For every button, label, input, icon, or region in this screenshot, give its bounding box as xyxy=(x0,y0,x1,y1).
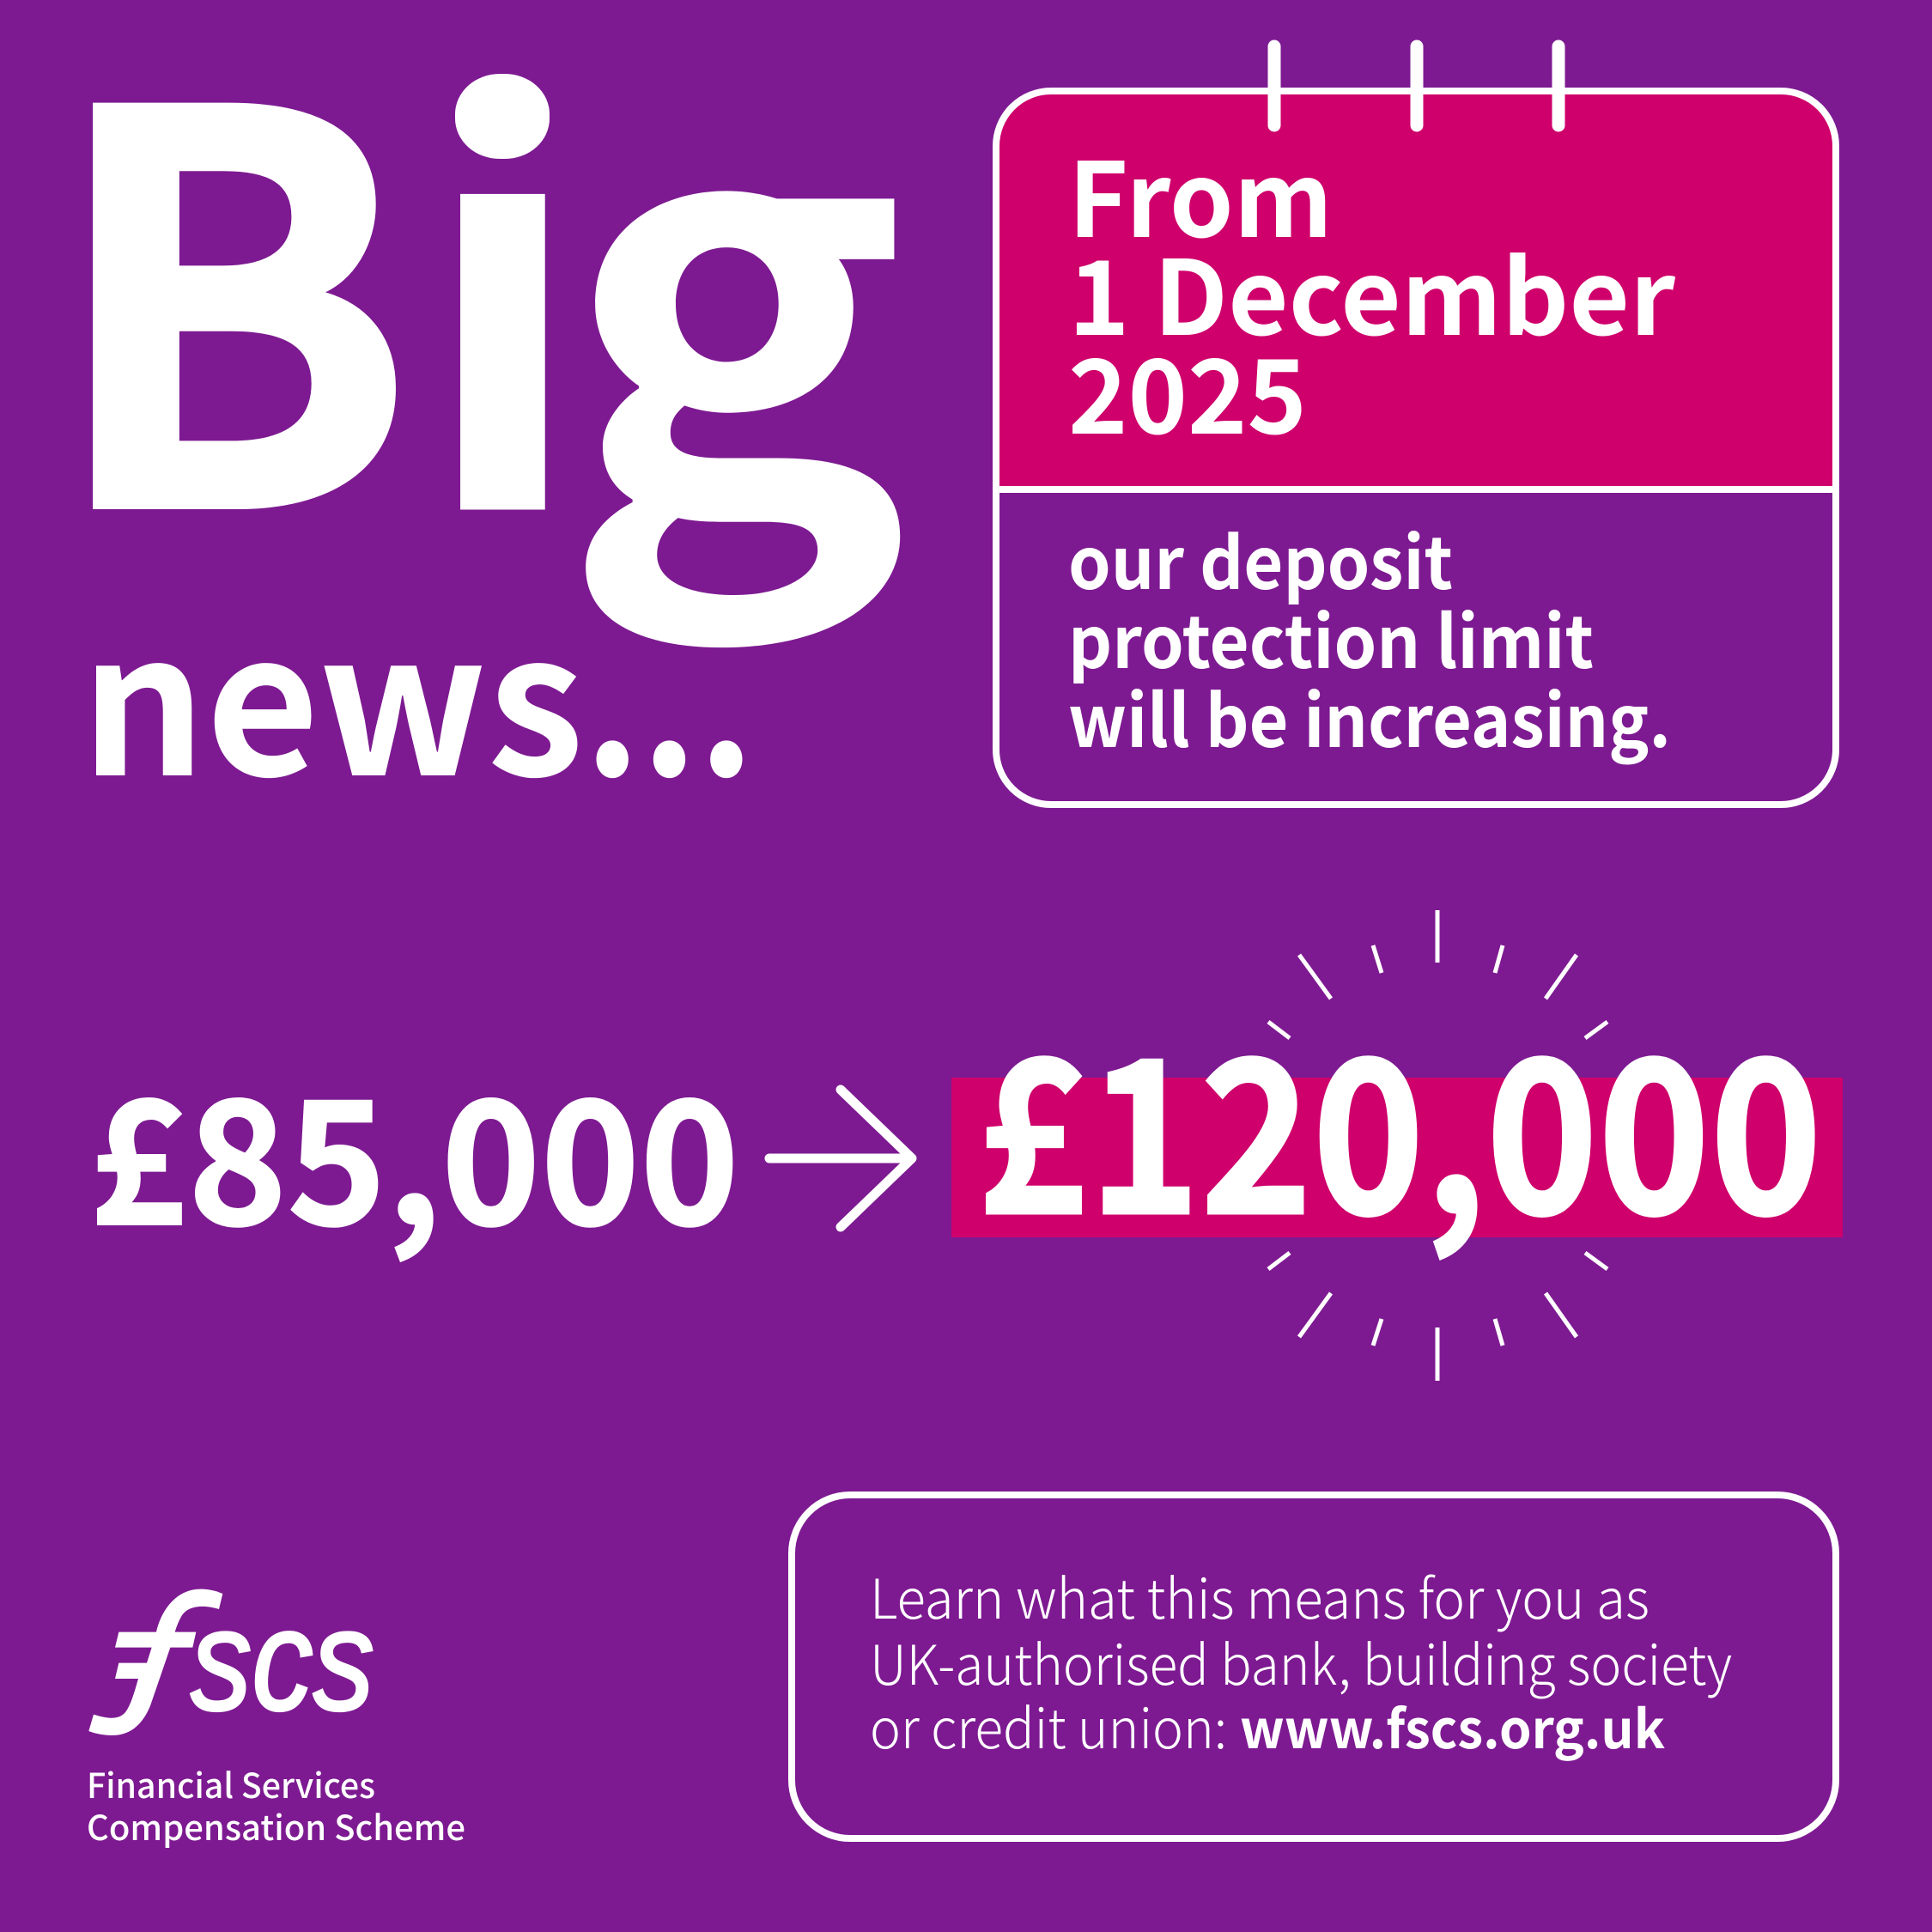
old limit amount: £85,000 xyxy=(88,1025,739,1274)
logo wordmark: scs xyxy=(191,1579,374,1741)
panel: call to action xyxy=(792,1495,1836,1838)
heading ellipsis: ... xyxy=(584,549,755,832)
organisation name: Financial Services xyxy=(87,1759,375,1808)
organisation name: Compensation Scheme xyxy=(87,1801,465,1850)
logo mark xyxy=(88,1589,222,1735)
call to action text: or credit union: xyxy=(870,1686,1227,1765)
calendar rings xyxy=(1274,46,1558,125)
heading word: news: news xyxy=(81,549,584,832)
panel outline xyxy=(792,1495,1836,1838)
announcement text: protection limit xyxy=(1068,586,1594,690)
heading: Big news xyxy=(93,74,900,778)
call to action text: UK-authorised bank, building society xyxy=(870,1622,1732,1701)
new limit amount: £120,000 xyxy=(976,967,1822,1275)
call to action text: www.fscs.org.uk xyxy=(1240,1686,1666,1764)
call to action text xyxy=(870,1556,1732,1765)
heading letter: i xyxy=(455,74,550,510)
calendar outline xyxy=(996,91,1836,805)
date text: From xyxy=(1068,118,1333,267)
date text: 2025 xyxy=(1068,314,1307,464)
announcement text: our deposit xyxy=(1068,507,1453,611)
announcement text xyxy=(1068,507,1671,769)
date text xyxy=(1068,118,1676,464)
panel: calendar date announcement xyxy=(996,46,1836,805)
calendar divider xyxy=(996,486,1836,493)
date text: 1 December xyxy=(1068,216,1676,365)
sunburst rays xyxy=(1268,910,1607,1381)
calendar pink header xyxy=(996,91,1836,489)
call to action text: Learn what this means for you as xyxy=(870,1556,1649,1635)
announcement text: will be increasing. xyxy=(1068,665,1671,769)
icon: arrow xyxy=(769,1090,912,1227)
new limit highlight band xyxy=(951,1078,1843,1237)
logo: FSCS xyxy=(87,1579,465,1850)
organisation name xyxy=(87,1759,465,1850)
